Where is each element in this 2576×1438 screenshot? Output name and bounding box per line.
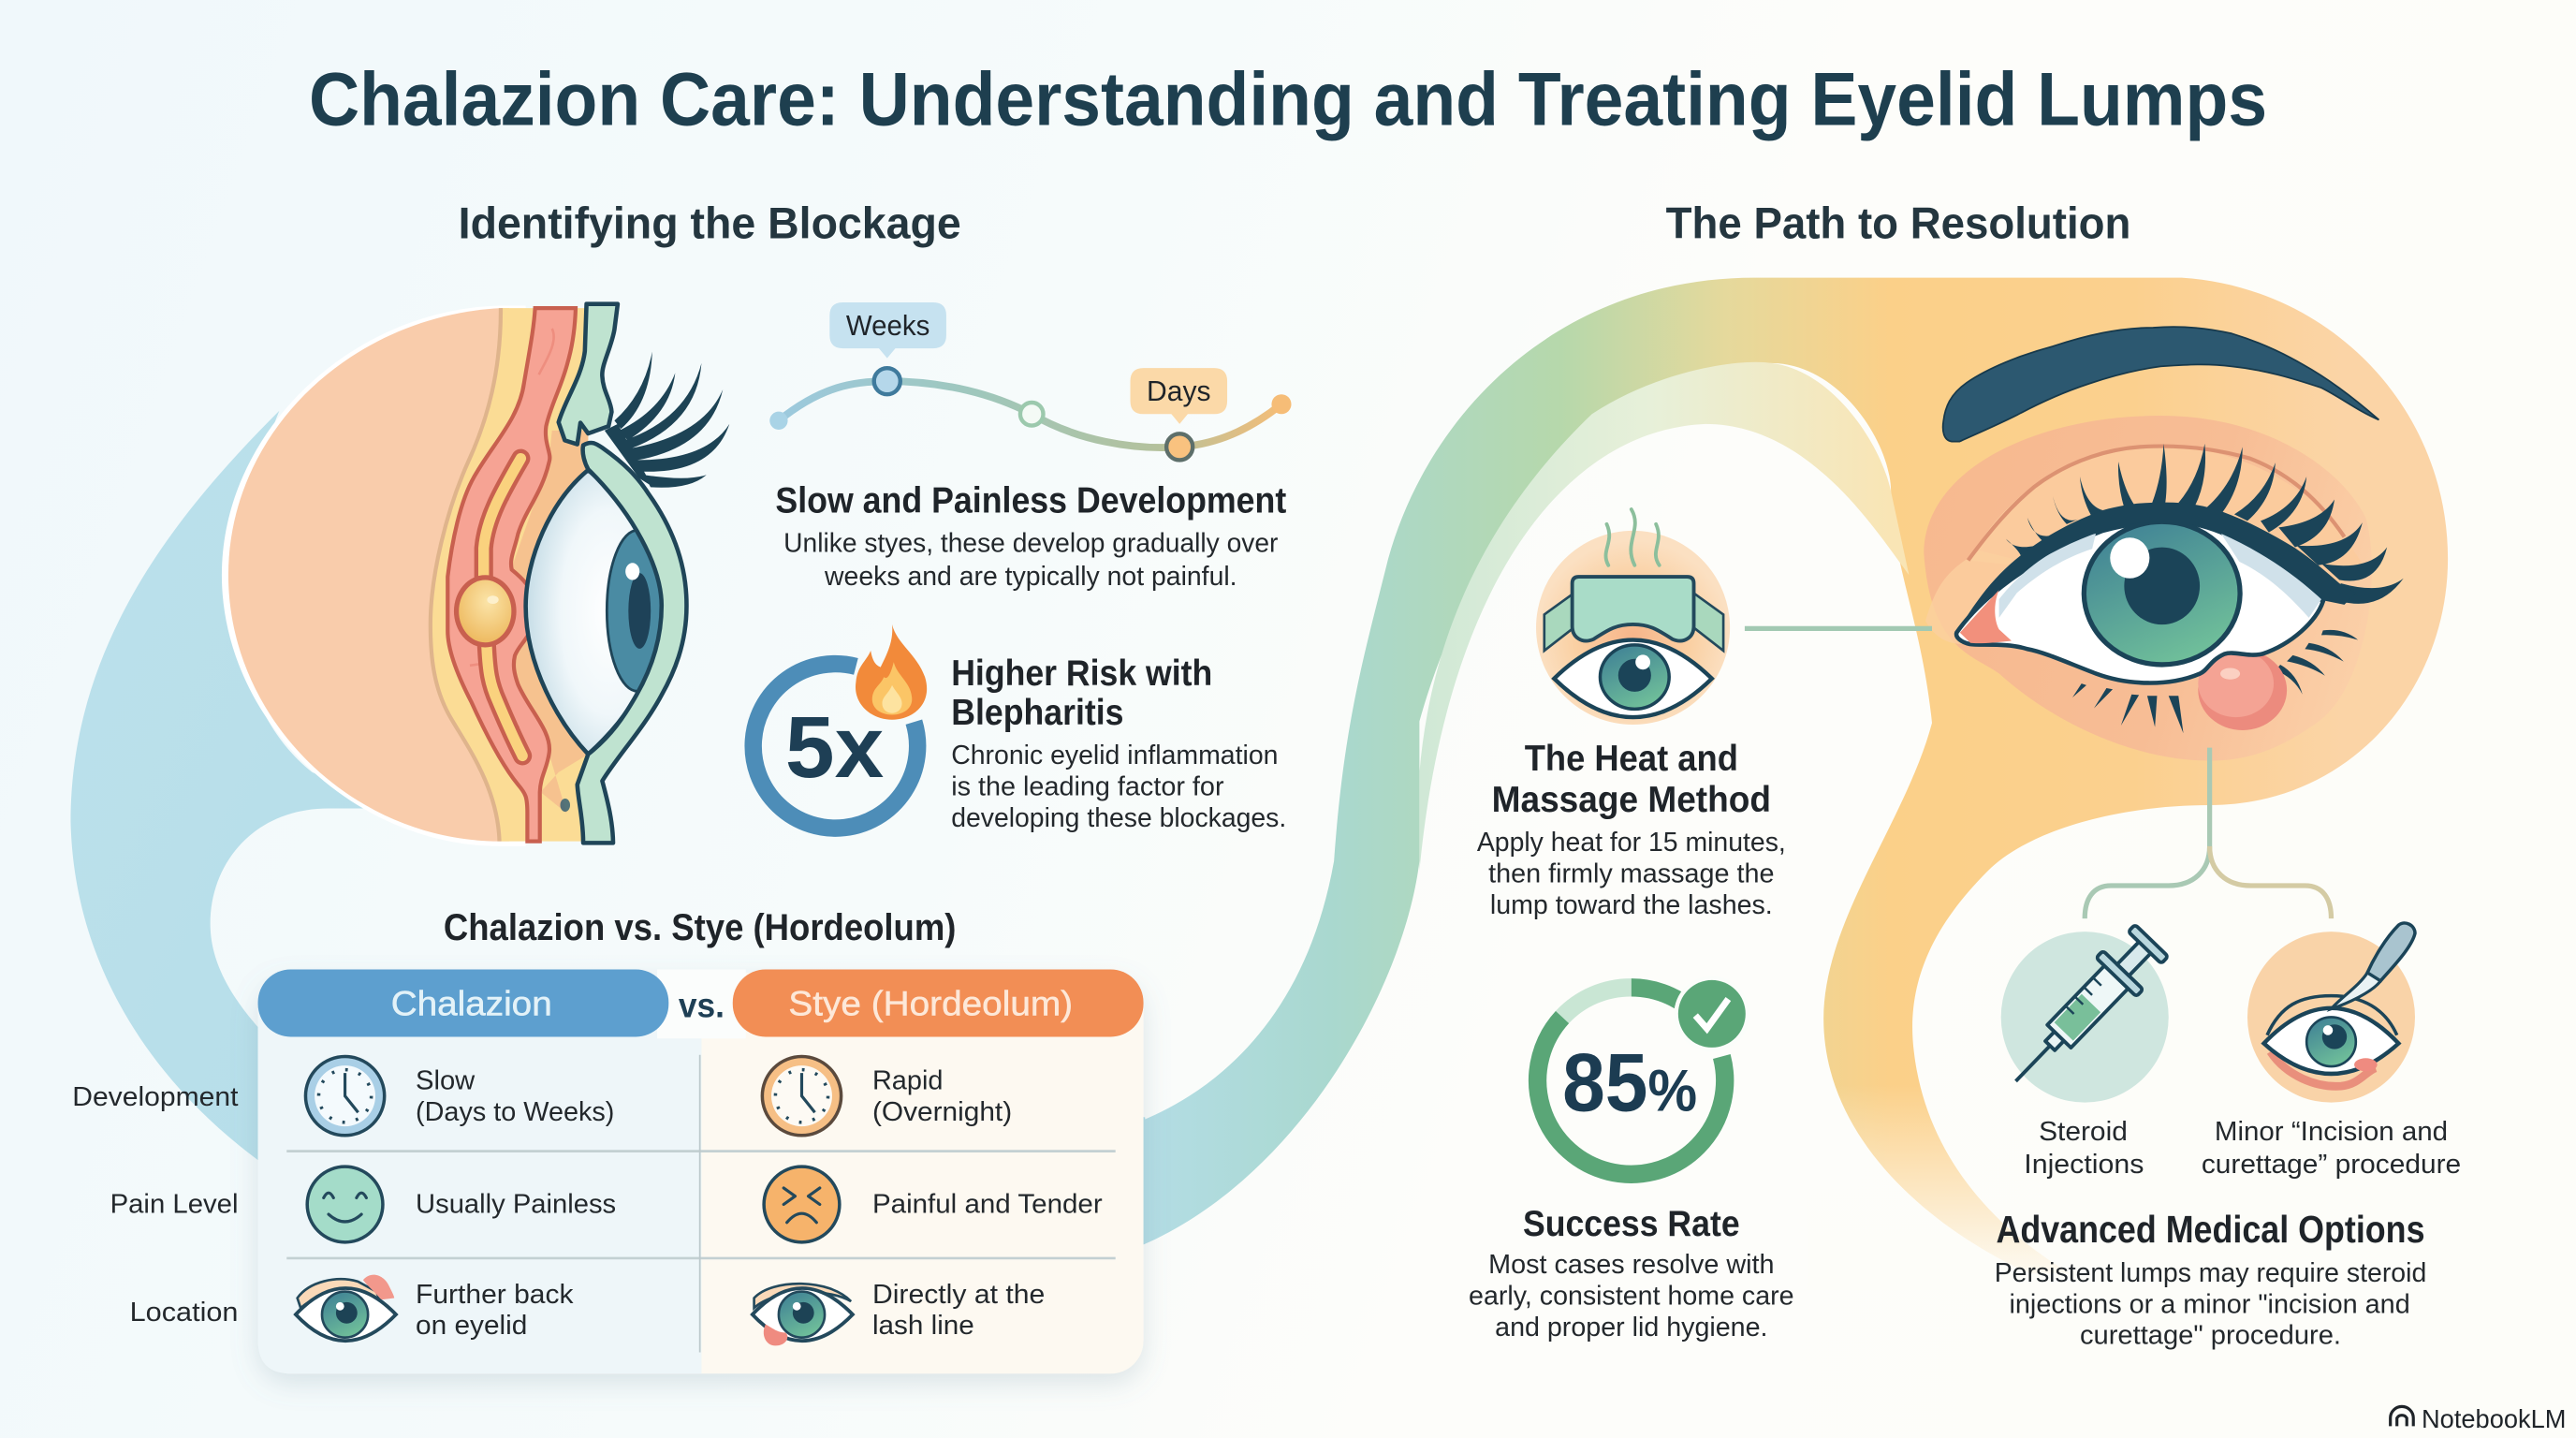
pill: Stye: [733, 970, 1144, 1036]
peach tissue: [222, 305, 526, 846]
skin tone around eye: [1924, 416, 2372, 761]
row labels: Location: [130, 1298, 238, 1328]
illustration: large eye with stye: [1924, 327, 2404, 761]
mask: [1573, 577, 1694, 641]
sclera: [1956, 521, 2323, 682]
stat: 5x ring with flame: 5x: [785, 698, 885, 796]
text: directly at lash line: lash line: [872, 1311, 974, 1341]
stye lump: [2198, 650, 2287, 730]
text: rapid: (Overnight): [872, 1097, 1012, 1127]
stat: 85 percent ring: [1538, 976, 1749, 1174]
row labels: [72, 1082, 238, 1328]
labels: incision and curettage: curettage” procedure: [2202, 1150, 2461, 1180]
labels: steroid injections: Injections: [2024, 1150, 2144, 1180]
swoosh: pathway band from blue to orange: [1134, 278, 2448, 1273]
caruncle: [1960, 590, 2012, 643]
icon: eye with lump further back: [296, 1275, 396, 1341]
text block: higher risk with blepharitis: developing these blockages.: [951, 803, 1286, 833]
bubble: Weeks: [829, 302, 946, 359]
heading: Chalazion vs. Stye: Chalazion vs. Stye (Hordeolum): [444, 907, 956, 948]
labels: steroid injections: [2024, 1117, 2144, 1180]
logo: NotebookLM: NotebookLM: [2422, 1404, 2566, 1433]
crease: [1969, 447, 2345, 560]
text block: higher risk with blepharitis: is the leading factor for: [951, 771, 1224, 801]
icon: rapid clock: [762, 1057, 842, 1136]
icon: smile face: [307, 1167, 383, 1242]
yellow layer: [431, 308, 588, 842]
text: further back: [416, 1280, 574, 1341]
text block: heat and massage: Massage Method: [1492, 780, 1771, 820]
bubble: Days: Days: [1147, 374, 1211, 407]
text block: advanced medical options: Advanced Medical Options: [1996, 1208, 2425, 1251]
lower lashes: [2072, 630, 2358, 733]
text block: slow and painless: Slow and Painless Development: [775, 481, 1286, 521]
text block: higher risk with blepharitis: Blepharitis: [951, 693, 1123, 733]
text block: higher risk with blepharitis: Higher Risk with: [951, 653, 1212, 694]
text: painful and tender: Painful and Tender: [872, 1189, 1103, 1219]
meibomian duct and gland: [454, 459, 522, 756]
heading: Identifying the Blockage: Identifying the Blockage: [459, 198, 961, 248]
swoosh: pale inner band: [1419, 362, 1909, 871]
title: Chalazion Care: Understanding and Treating Eyelid Lumps: [309, 57, 2267, 141]
stat: 85 percent ring: 85%: [1562, 1036, 1697, 1128]
icon: flame: [856, 624, 927, 720]
icon: warm compress on eye: [1536, 509, 1730, 725]
eyebrow: [1943, 327, 2378, 442]
labels: incision and curettage: [2202, 1117, 2461, 1180]
connector: eye to medical options: [2085, 748, 2331, 918]
pill: Chalazion: Chalazion: [391, 985, 552, 1023]
stat: 5x ring with flame: [754, 624, 927, 829]
text: rapid: [872, 1066, 1012, 1127]
text: slow: Slow: [416, 1066, 475, 1096]
lighter lid area under crease: [1969, 447, 2365, 594]
lashes: [2006, 444, 2404, 604]
row labels: Development: [72, 1082, 238, 1112]
timeline chart: weeks vs days: [769, 302, 1292, 460]
text block: slow and painless: [775, 481, 1286, 592]
text block: success rate: Success Rate: [1523, 1204, 1740, 1244]
text: slow: (Days to Weeks): [416, 1097, 614, 1127]
text block: success rate: [1469, 1204, 1794, 1343]
text block: advanced medical options: injections or a minor "incision and: [2009, 1289, 2410, 1319]
eyelashes: [605, 352, 729, 488]
text block: higher risk with blepharitis: [951, 653, 1286, 833]
label: vs.: vs.: [679, 986, 724, 1024]
iris: [607, 530, 668, 691]
labels: steroid injections: Steroid: [2039, 1117, 2128, 1147]
lighter skin band at inner corner: [1925, 550, 2012, 644]
text block: success rate: and proper lid hygiene.: [1495, 1313, 1767, 1343]
strap: [1544, 594, 1723, 651]
illustration: eyelid cross-section: [222, 304, 729, 846]
text: usually painless: Usually Painless: [416, 1189, 616, 1219]
upper lid tissue: [559, 304, 618, 445]
icon: scalpel and eye: [2247, 923, 2415, 1103]
text block: success rate: early, consistent home care: [1469, 1282, 1794, 1312]
text block: heat and massage: lump toward the lashes.: [1490, 890, 1773, 920]
text block: heat and massage: Apply heat for 15 minutes,: [1477, 828, 1786, 858]
upper lid band: [1956, 503, 2356, 633]
tan tissue line: [431, 308, 501, 842]
row labels: Pain Level: [110, 1189, 238, 1219]
text block: advanced medical options: curettage" procedure.: [2080, 1321, 2341, 1351]
text: rapid: Rapid: [872, 1066, 943, 1096]
swoosh: blue crescent behind left panel: [70, 411, 1145, 1282]
bubble: Weeks: Weeks: [846, 309, 929, 342]
fade of the orange tail: [1808, 1084, 2103, 1290]
text: further back: on eyelid: [416, 1311, 527, 1341]
sclera shadows: [1999, 534, 2321, 618]
icon: slow clock: [305, 1057, 385, 1136]
labels: incision and curettage: Minor “Incision and: [2215, 1117, 2448, 1147]
text: slow: [416, 1066, 614, 1127]
text block: heat and massage: then firmly massage the: [1488, 858, 1775, 888]
text block: advanced medical options: [1995, 1208, 2426, 1351]
text: directly at lash line: [872, 1280, 1045, 1341]
lower lid band: [578, 443, 686, 843]
text block: slow and painless: Unlike styes, these develop gradually over: [783, 529, 1279, 559]
text: directly at lash line: Directly at the: [872, 1280, 1045, 1310]
icon: steroid syringe: [1996, 921, 2172, 1103]
text block: heat and massage: [1477, 739, 1786, 920]
text block: higher risk with blepharitis: Chronic eyelid inflammation: [951, 741, 1278, 770]
icon: check badge: [1674, 976, 1749, 1051]
panel: comparison table: [258, 970, 1144, 1373]
eye: [1554, 640, 1712, 717]
pill: Stye: Stye (Hordeolum): [788, 985, 1073, 1023]
sclera: [526, 470, 661, 755]
steam: [1605, 509, 1660, 565]
orange layer near globe: [511, 431, 588, 814]
red tarsal band: [447, 308, 576, 842]
icon: eye with lump at lash line: [753, 1284, 853, 1345]
connector: heat to eye: [1745, 627, 1932, 630]
icon: pained face: [764, 1167, 840, 1242]
text block: advanced medical options: Persistent lumps may require steroid: [1995, 1258, 2426, 1288]
iris: [2084, 521, 2240, 665]
text block: success rate: Most cases resolve with: [1488, 1250, 1775, 1280]
heading: The Path to Resolution: The Path to Resolution: [1666, 198, 2130, 248]
text: further back: Further back: [416, 1280, 574, 1310]
bubble: Days: [1131, 368, 1227, 424]
pill: Chalazion: [258, 970, 668, 1036]
text block: slow and painless: weeks and are typically not painful.: [824, 562, 1237, 592]
text block: heat and massage: The Heat and: [1525, 739, 1738, 779]
